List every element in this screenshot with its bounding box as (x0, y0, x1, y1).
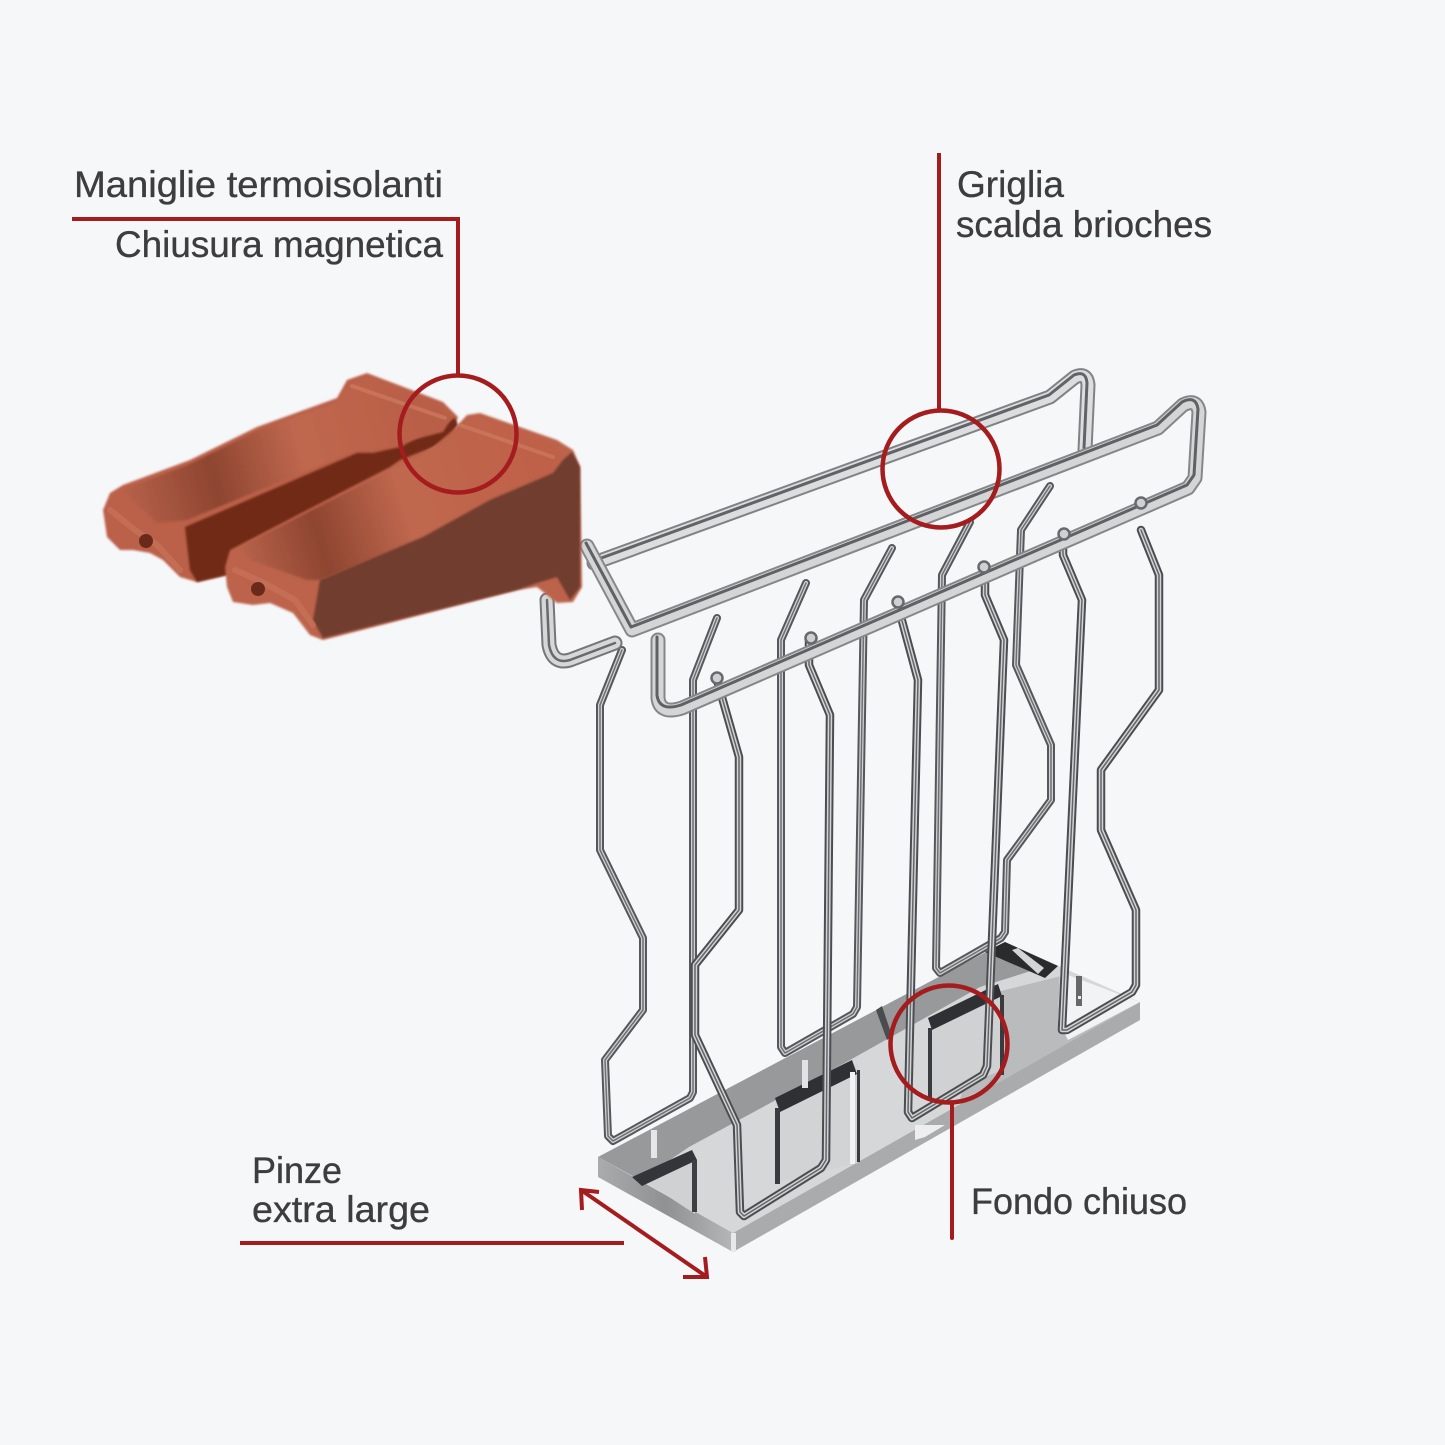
callout: extra large tongs (240, 1150, 707, 1277)
front rail (586, 400, 1199, 710)
base plate (598, 942, 1140, 1252)
toaster tongs rack (547, 374, 1199, 1252)
screw hole (139, 534, 153, 548)
label: closed bottom: Fondo chiuso (971, 1181, 1187, 1222)
detail circle (882, 410, 1000, 528)
callout: handles and magnetic closure (72, 164, 516, 492)
callout: closed bottom (890, 986, 1187, 1238)
wire clips: front row (695, 530, 1159, 1216)
leader line (937, 153, 941, 411)
side rail near handle (547, 600, 615, 661)
callout: brioche warming rack (882, 153, 1212, 528)
left handle (103, 373, 458, 582)
detail circle (400, 376, 516, 492)
wire clips: back row (600, 486, 1051, 1141)
detail circle (890, 986, 1008, 1102)
leader line (950, 1103, 954, 1238)
leader line (240, 1241, 624, 1245)
screw hole (251, 582, 265, 596)
leader line (72, 219, 458, 376)
wire hooks (712, 498, 1146, 684)
width arrow (581, 1190, 707, 1277)
label: rack: Griglia (957, 164, 1064, 205)
right handle (225, 413, 582, 640)
upper back rail (593, 374, 1088, 563)
label: handles: Maniglie termoisolanti (74, 164, 443, 205)
label: extra large: extra large (252, 1189, 430, 1230)
label: brioche warmer: scalda brioches (956, 204, 1212, 245)
heat-insulating handles (103, 373, 582, 640)
label: tongs: Pinze (252, 1150, 342, 1191)
label: magnetic closure: Chiusura magnetica (115, 224, 443, 265)
